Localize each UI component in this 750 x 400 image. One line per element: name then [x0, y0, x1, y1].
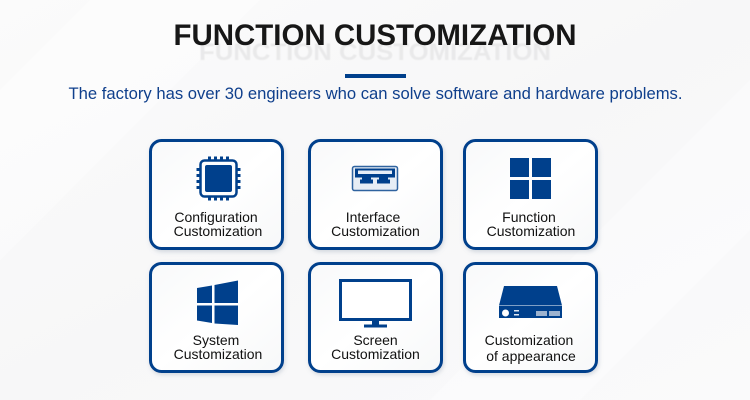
label: configuration customization: Configuration: [174, 209, 258, 225]
icon: usb port: [352, 166, 398, 190]
label: interface customization: Interface: [346, 209, 400, 225]
icon: four squares: [510, 158, 551, 199]
icon: windows logo: [197, 280, 238, 325]
label: function customization: Function: [502, 209, 556, 225]
panel: screen customization: [310, 264, 442, 372]
icon: server box: [499, 286, 562, 318]
title reflection: FUNCTION CUSTOMIZATION: [199, 39, 551, 66]
panel: function customization: [464, 140, 596, 248]
panel: customization of appearance: [464, 264, 596, 372]
subtitle: The factory has over 30 engineers who can solve software and hardware problems.: [68, 85, 682, 103]
panel: system customization: [150, 264, 282, 372]
icon: processor chip: [196, 156, 240, 200]
label: system customization: System: [193, 332, 239, 348]
label: configuration customization: Customization: [174, 223, 262, 239]
label: function customization: Customization: [487, 223, 575, 239]
panel: configuration customization: [150, 140, 282, 248]
title underline: [345, 74, 406, 78]
label: customization of appearance: Customization: [485, 332, 573, 348]
label: interface customization: Customization: [331, 223, 420, 239]
icon: monitor: [340, 280, 410, 328]
label: system customization: Customization: [174, 346, 262, 362]
panel: interface customization: [310, 140, 442, 248]
label: screen customization: Customization: [331, 346, 420, 362]
label: screen customization: Screen: [353, 332, 398, 348]
title: FUNCTION CUSTOMIZATION: [174, 19, 576, 52]
label: customization of appearance: of appearance: [486, 348, 576, 364]
